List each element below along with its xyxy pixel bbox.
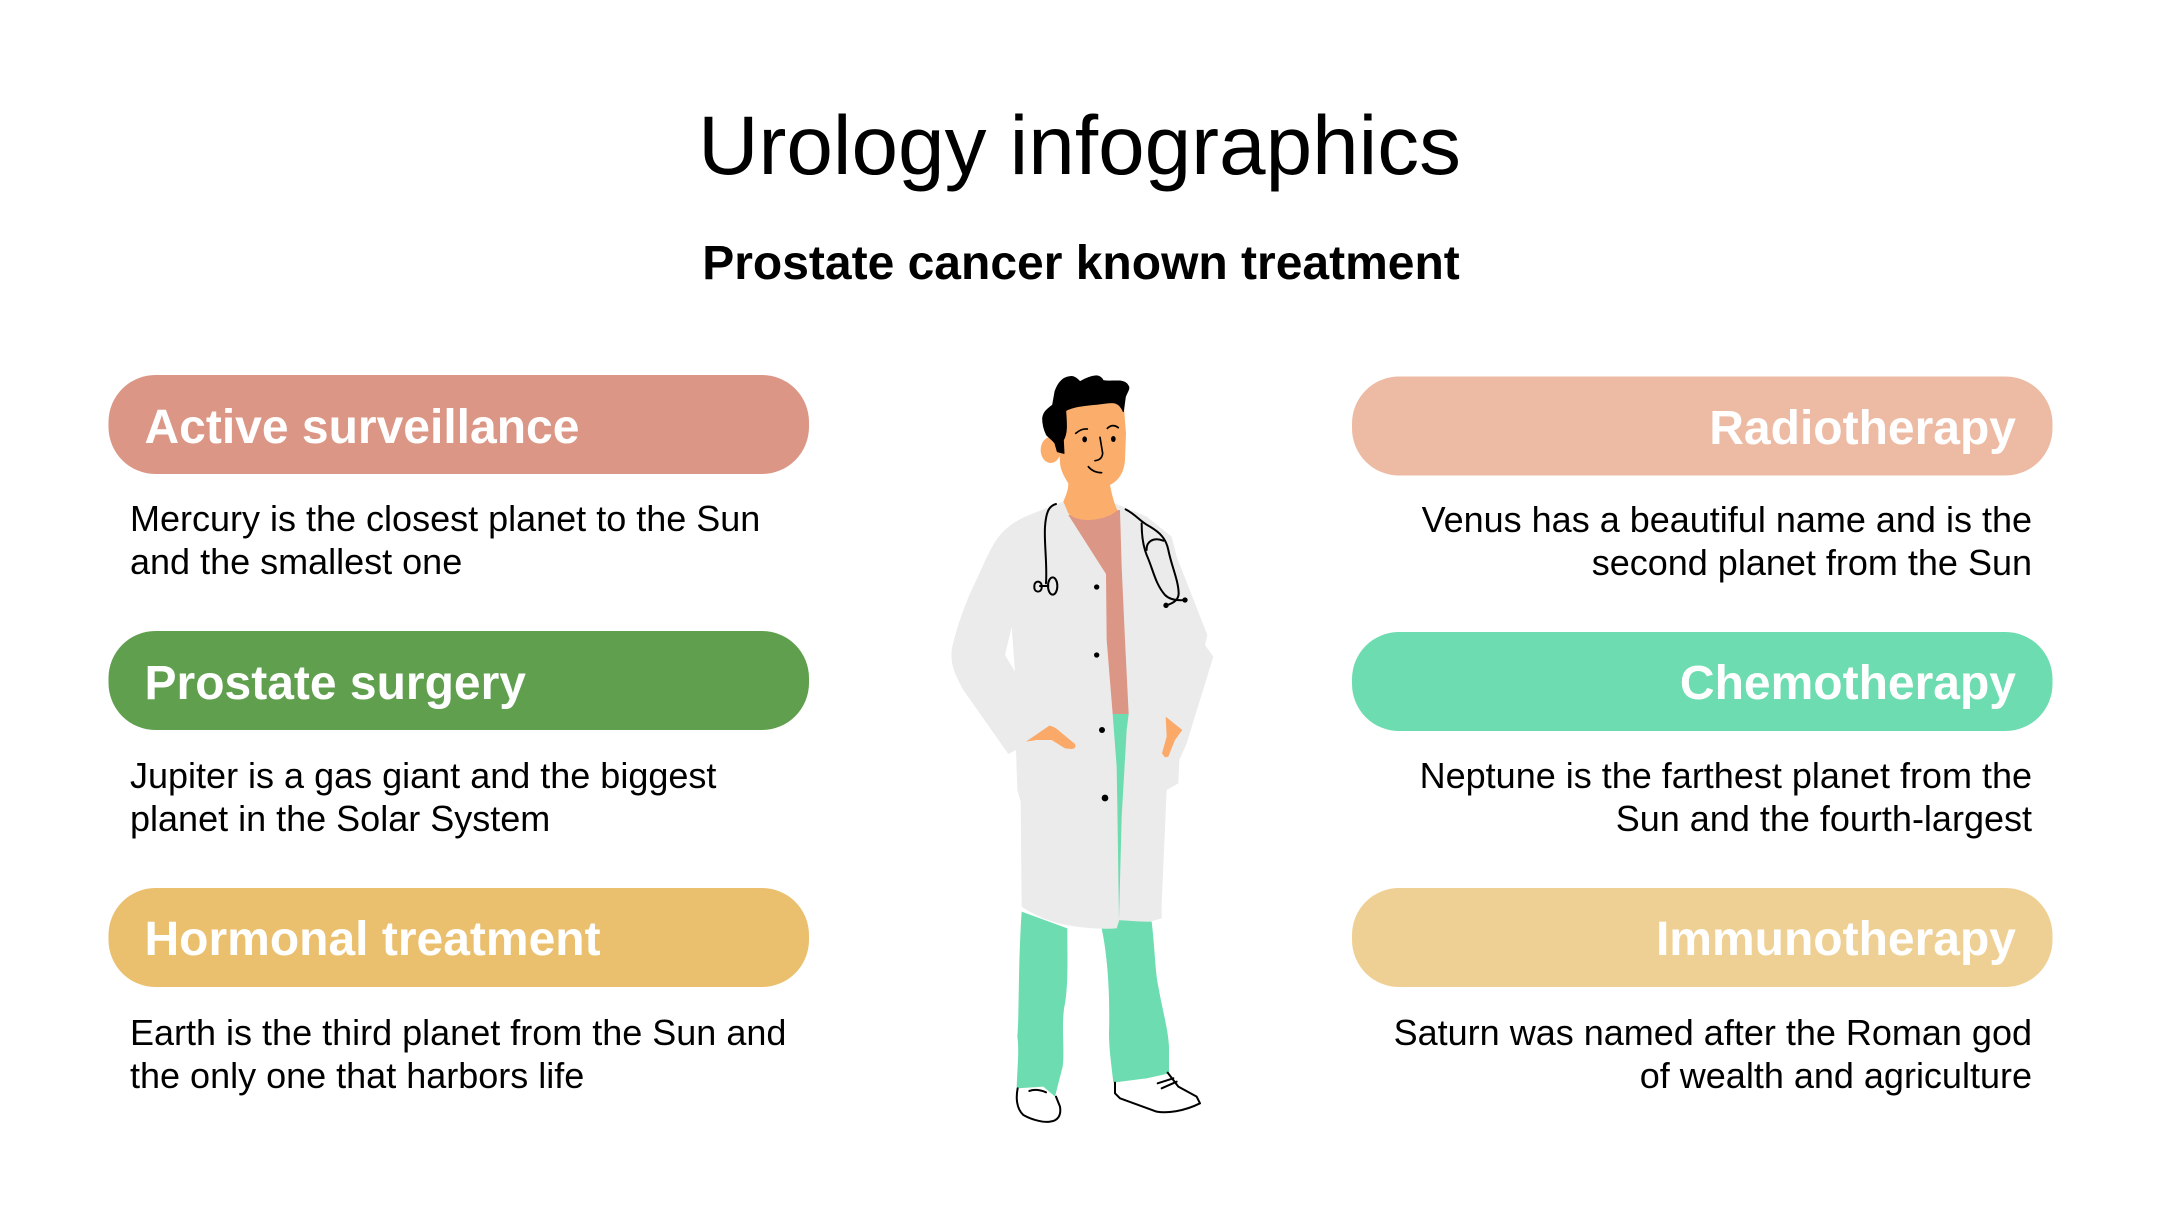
text: mercury: and the smallest one — [130, 541, 462, 582]
face and neck — [1058, 400, 1126, 520]
pill: immunotherapy: Immunotherapy — [1656, 913, 2016, 966]
panel: radiotherapy — [1352, 376, 2052, 583]
text: saturn — [1394, 1012, 2032, 1096]
text: earth: the only one that harbors life — [130, 1055, 584, 1096]
pill: active surveillance: Active surveillance — [144, 401, 579, 454]
pill: hormonal treatment: Hormonal treatment — [144, 913, 601, 966]
pill: prostate surgery: Prostate surgery — [144, 657, 526, 710]
pill: active surveillance — [108, 375, 809, 474]
shirt — [1068, 510, 1129, 714]
text: neptune: Neptune is the farthest planet from the — [1420, 755, 2032, 796]
pill: hormonal treatment — [108, 888, 809, 987]
title: Urology infographics — [698, 98, 1461, 192]
pill: radiotherapy — [1352, 376, 2052, 476]
text: mercury — [130, 498, 760, 582]
subtitle: Prostate cancer known treatment — [702, 237, 1460, 290]
shoes — [1017, 1073, 1200, 1122]
text: earth — [130, 1012, 786, 1096]
text: jupiter — [130, 755, 716, 839]
text: venus: second planet from the Sun — [1592, 542, 2032, 583]
text: neptune — [1420, 755, 2032, 839]
pill: radiotherapy: Radiotherapy — [1709, 402, 2016, 455]
pill: chemotherapy — [1352, 632, 2052, 731]
text: mercury: Mercury is the closest planet to the Sun — [130, 498, 760, 539]
coat arm gap — [1005, 627, 1015, 672]
ear — [1041, 437, 1061, 463]
panel: hormonal treatment — [108, 888, 809, 1096]
hands — [1026, 717, 1182, 757]
text: neptune: Sun and the fourth-largest — [1616, 798, 2032, 839]
illustration: doctor — [951, 376, 1213, 1122]
text: jupiter: Jupiter is a gas giant and the biggest — [130, 755, 716, 796]
text: jupiter: planet in the Solar System — [130, 798, 550, 839]
pill: immunotherapy — [1352, 888, 2052, 987]
text: earth: Earth is the third planet from the Sun and — [130, 1012, 786, 1053]
text: saturn: Saturn was named after the Roman god — [1394, 1012, 2032, 1053]
trousers — [1017, 912, 1169, 1097]
text: venus: Venus has a beautiful name and is the — [1422, 499, 2032, 540]
panel: active surveillance — [108, 375, 809, 582]
stethoscope — [1034, 504, 1187, 607]
text: saturn: of wealth and agriculture — [1640, 1055, 2032, 1096]
text: venus — [1422, 499, 2032, 583]
lab coat — [951, 502, 1213, 929]
panel: immunotherapy — [1352, 888, 2052, 1096]
face details — [1076, 426, 1118, 473]
pill: chemotherapy: Chemotherapy — [1680, 657, 2016, 710]
hair — [1043, 376, 1129, 453]
panel: prostate surgery — [108, 631, 809, 839]
pill: prostate surgery — [108, 631, 809, 730]
panel: chemotherapy — [1352, 632, 2052, 839]
coat buttons — [1094, 584, 1108, 801]
trousers front strip — [1113, 714, 1129, 920]
